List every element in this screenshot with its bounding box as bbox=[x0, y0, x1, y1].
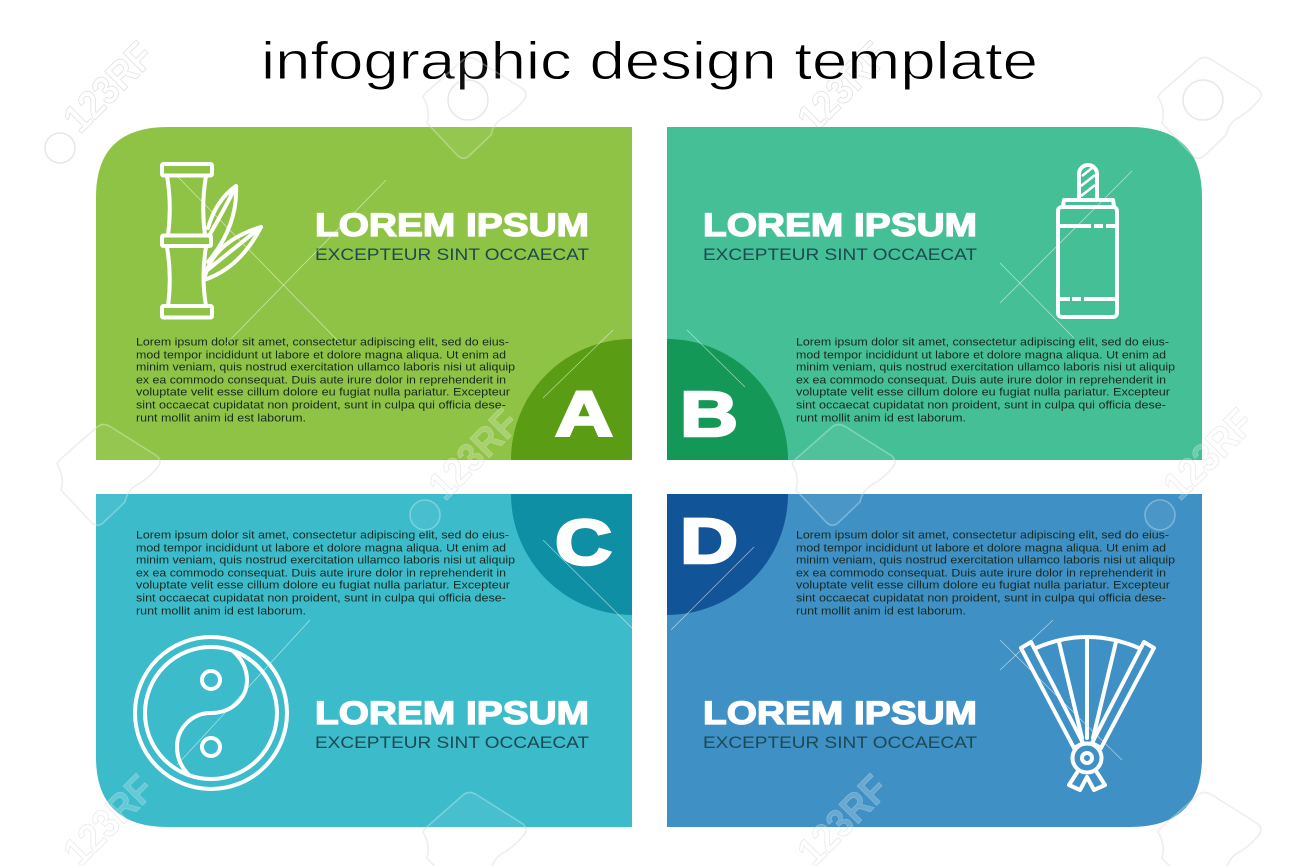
body text bbox=[136, 336, 515, 424]
body text: sint occaecat cupidatat non proident, sunt in culpa qui officia dese- bbox=[136, 592, 506, 604]
body text: runt mollit anim id est laborum. bbox=[136, 606, 306, 618]
watermarks on panels: 123RF bbox=[1155, 401, 1263, 508]
body text: Lorem ipsum dolor sit amet, consectetur adipiscing elit, sed do eius- bbox=[796, 530, 1169, 542]
badge: A bbox=[511, 339, 632, 460]
panel: C bbox=[96, 494, 632, 827]
body text: voluptate velit esse cillum dolore eu fugiat nulla pariatur. Excepteur bbox=[136, 386, 510, 398]
subheading: EXCEPTEUR SINT OCCAECAT bbox=[703, 245, 977, 264]
body text: minim veniam, quis nostrud exercitation ullamco laboris nisi ut aliquip bbox=[136, 554, 515, 566]
body text: ex ea commodo consequat. Duis aute irure dolor in reprehenderit in bbox=[136, 568, 506, 580]
body text: minim veniam, quis nostrud exercitation ullamco laboris nisi ut aliquip bbox=[796, 554, 1175, 566]
watermarks on background: 123RF bbox=[420, 401, 528, 508]
watermarks on background: 123RF bbox=[55, 34, 163, 141]
heading: LOREM IPSUM bbox=[703, 207, 977, 243]
body text bbox=[796, 530, 1175, 618]
panel: D bbox=[667, 494, 1202, 827]
body text: mod tempor incididunt ut labore et dolore magna aliqua. Ut enim ad bbox=[796, 350, 1166, 362]
subheading: EXCEPTEUR SINT OCCAECAT bbox=[315, 245, 589, 264]
body text bbox=[136, 530, 515, 618]
body text: sint occaecat cupidatat non proident, sunt in culpa qui officia dese- bbox=[136, 400, 506, 412]
watermarks on panels: 123RF bbox=[420, 401, 528, 508]
body text: mod tempor incididunt ut labore et dolore magna aliqua. Ut enim ad bbox=[136, 350, 506, 362]
heading: LOREM IPSUM bbox=[703, 695, 977, 731]
badge: B: B bbox=[680, 378, 738, 450]
body text: voluptate velit esse cillum dolore eu fugiat nulla pariatur. Excepteur bbox=[796, 386, 1170, 398]
icon: yin yang bbox=[135, 637, 287, 789]
body text: runt mollit anim id est laborum. bbox=[136, 412, 306, 424]
watermark lines bbox=[177, 171, 1132, 765]
subheading: EXCEPTEUR SINT OCCAECAT bbox=[703, 733, 977, 752]
body text: ex ea commodo consequat. Duis aute irure dolor in reprehenderit in bbox=[796, 374, 1166, 386]
icon: bottle bbox=[1058, 165, 1117, 317]
badge: C: C bbox=[555, 506, 612, 578]
heading: LOREM IPSUM bbox=[315, 207, 589, 243]
watermarks on background: 123RF bbox=[1155, 401, 1263, 508]
body text: voluptate velit esse cillum dolore eu fugiat nulla pariatur. Excepteur bbox=[796, 580, 1170, 592]
heading: LOREM IPSUM bbox=[315, 695, 589, 731]
body text: sint occaecat cupidatat non proident, sunt in culpa qui officia dese- bbox=[796, 592, 1166, 604]
badge: D bbox=[667, 494, 788, 615]
body text: mod tempor incididunt ut labore et dolore magna aliqua. Ut enim ad bbox=[136, 542, 506, 554]
icon: bamboo bbox=[162, 164, 261, 318]
body text: mod tempor incididunt ut labore et dolore magna aliqua. Ut enim ad bbox=[796, 542, 1166, 554]
badge: C bbox=[511, 494, 632, 615]
body text: minim veniam, quis nostrud exercitation ullamco laboris nisi ut aliquip bbox=[796, 362, 1175, 374]
body text: voluptate velit esse cillum dolore eu fugiat nulla pariatur. Excepteur bbox=[136, 580, 510, 592]
body text: runt mollit anim id est laborum. bbox=[796, 412, 966, 424]
watermarks on background: 123RF bbox=[789, 34, 897, 141]
panel: B bbox=[667, 127, 1202, 460]
badge: B bbox=[667, 339, 788, 460]
body text: Lorem ipsum dolor sit amet, consectetur adipiscing elit, sed do eius- bbox=[796, 336, 1169, 348]
icon: folding fan bbox=[1021, 637, 1154, 790]
title: infographic design template bbox=[261, 32, 1038, 91]
body text bbox=[796, 336, 1175, 424]
body text: Lorem ipsum dolor sit amet, consectetur adipiscing elit, sed do eius- bbox=[136, 530, 509, 542]
subheading: EXCEPTEUR SINT OCCAECAT bbox=[315, 733, 589, 752]
body text: ex ea commodo consequat. Duis aute irure dolor in reprehenderit in bbox=[796, 568, 1166, 580]
body text: sint occaecat cupidatat non proident, sunt in culpa qui officia dese- bbox=[796, 400, 1166, 412]
panel: A bbox=[96, 127, 632, 460]
body text: Lorem ipsum dolor sit amet, consectetur adipiscing elit, sed do eius- bbox=[136, 336, 509, 348]
badge: D: D bbox=[680, 505, 738, 577]
badge: A: A bbox=[555, 378, 613, 450]
body text: runt mollit anim id est laborum. bbox=[796, 606, 966, 618]
body text: ex ea commodo consequat. Duis aute irure dolor in reprehenderit in bbox=[136, 374, 506, 386]
body text: minim veniam, quis nostrud exercitation ullamco laboris nisi ut aliquip bbox=[136, 362, 515, 374]
